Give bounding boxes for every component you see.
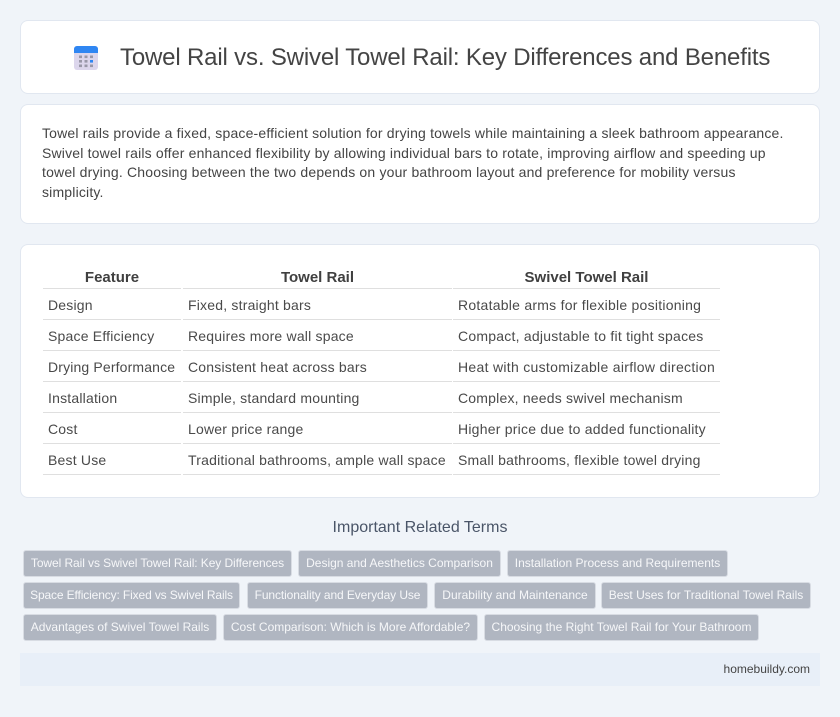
intro text: Swivel towel rails offer enhanced flexibility by allowing individual bars to rotate, improving airflow and speeding up: [42, 145, 766, 161]
header panel: [20, 20, 820, 94]
tag: Advantages of Swivel Towel Rails: [31, 620, 209, 634]
tag: [23, 582, 240, 609]
tag: Towel Rail vs Swivel Towel Rail: Key Differences: [31, 556, 284, 570]
row: installation: [43, 390, 720, 413]
row: design: Rotatable arms for flexible positioning: [458, 297, 701, 313]
tag: [247, 582, 428, 609]
row: design: [43, 297, 720, 320]
tag: [298, 550, 501, 577]
footer bar: [20, 653, 820, 686]
row: installation: Simple, standard mounting: [188, 390, 360, 406]
intro text: simplicity.: [42, 184, 104, 200]
related terms heading: Important Related Terms: [333, 519, 507, 536]
tag: [601, 582, 811, 609]
row: design: Design: [48, 297, 93, 313]
row: cost: Lower price range: [188, 421, 303, 437]
row: best use: [43, 452, 720, 475]
footer credit: homebuildy.com: [724, 662, 810, 676]
tag: [23, 614, 217, 641]
related terms tags: [23, 550, 811, 641]
tag: Space Efficiency: Fixed vs Swivel Rails: [30, 588, 233, 602]
row: best use: Best Use: [48, 452, 106, 468]
tag: [434, 582, 596, 609]
row: drying performance: Drying Performance: [48, 359, 175, 375]
icon: calendar: [74, 46, 98, 70]
row: drying performance: Heat with customizable airflow direction: [458, 359, 715, 375]
tag: Durability and Maintenance: [442, 588, 588, 602]
column headings: Feature: [85, 269, 139, 286]
tag: [23, 550, 292, 577]
row: space efficiency: [43, 328, 720, 351]
comparison table panel: [20, 244, 820, 498]
column headings: Towel Rail: [281, 269, 354, 286]
tag: Best Uses for Traditional Towel Rails: [609, 588, 803, 602]
row: cost: [43, 421, 720, 444]
intro panel: [20, 104, 820, 224]
row: best use: Traditional bathrooms, ample wall space: [188, 452, 446, 468]
tag: Installation Process and Requirements: [515, 556, 720, 570]
row: space efficiency: Requires more wall space: [188, 328, 354, 344]
row: space efficiency: Space Efficiency: [48, 328, 154, 344]
intro text: Towel rails provide a fixed, space-efficient solution for drying towels while maintaining a sleek bathroom appearance.: [42, 125, 784, 141]
row: installation: Installation: [48, 390, 117, 406]
tag: Cost Comparison: Which is More Affordable?: [231, 620, 470, 634]
row: cost: Higher price due to added functionality: [458, 421, 706, 437]
row: drying performance: [43, 359, 720, 382]
tag: [507, 550, 728, 577]
intro text: [42, 125, 784, 200]
row: design: Fixed, straight bars: [188, 297, 311, 313]
row: installation: Complex, needs swivel mechanism: [458, 390, 683, 406]
row: space efficiency: Compact, adjustable to fit tight spaces: [458, 328, 704, 344]
title: Towel Rail vs. Swivel Towel Rail: Key Differences and Benefits: [120, 44, 770, 71]
tag: Design and Aesthetics Comparison: [306, 556, 493, 570]
column headings: [43, 269, 720, 289]
tag: [223, 614, 478, 641]
column headings: Swivel Towel Rail: [525, 269, 648, 286]
tag: Functionality and Everyday Use: [255, 588, 420, 602]
table: [43, 269, 720, 475]
tag: Choosing the Right Towel Rail for Your Bathroom: [492, 620, 751, 634]
row: drying performance: Consistent heat across bars: [188, 359, 367, 375]
row: best use: Small bathrooms, flexible towel drying: [458, 452, 701, 468]
row: cost: Cost: [48, 421, 78, 437]
tag: [484, 614, 759, 641]
intro text: towel drying. Choosing between the two depends on your bathroom layout and preference for mobility versus: [42, 164, 736, 180]
